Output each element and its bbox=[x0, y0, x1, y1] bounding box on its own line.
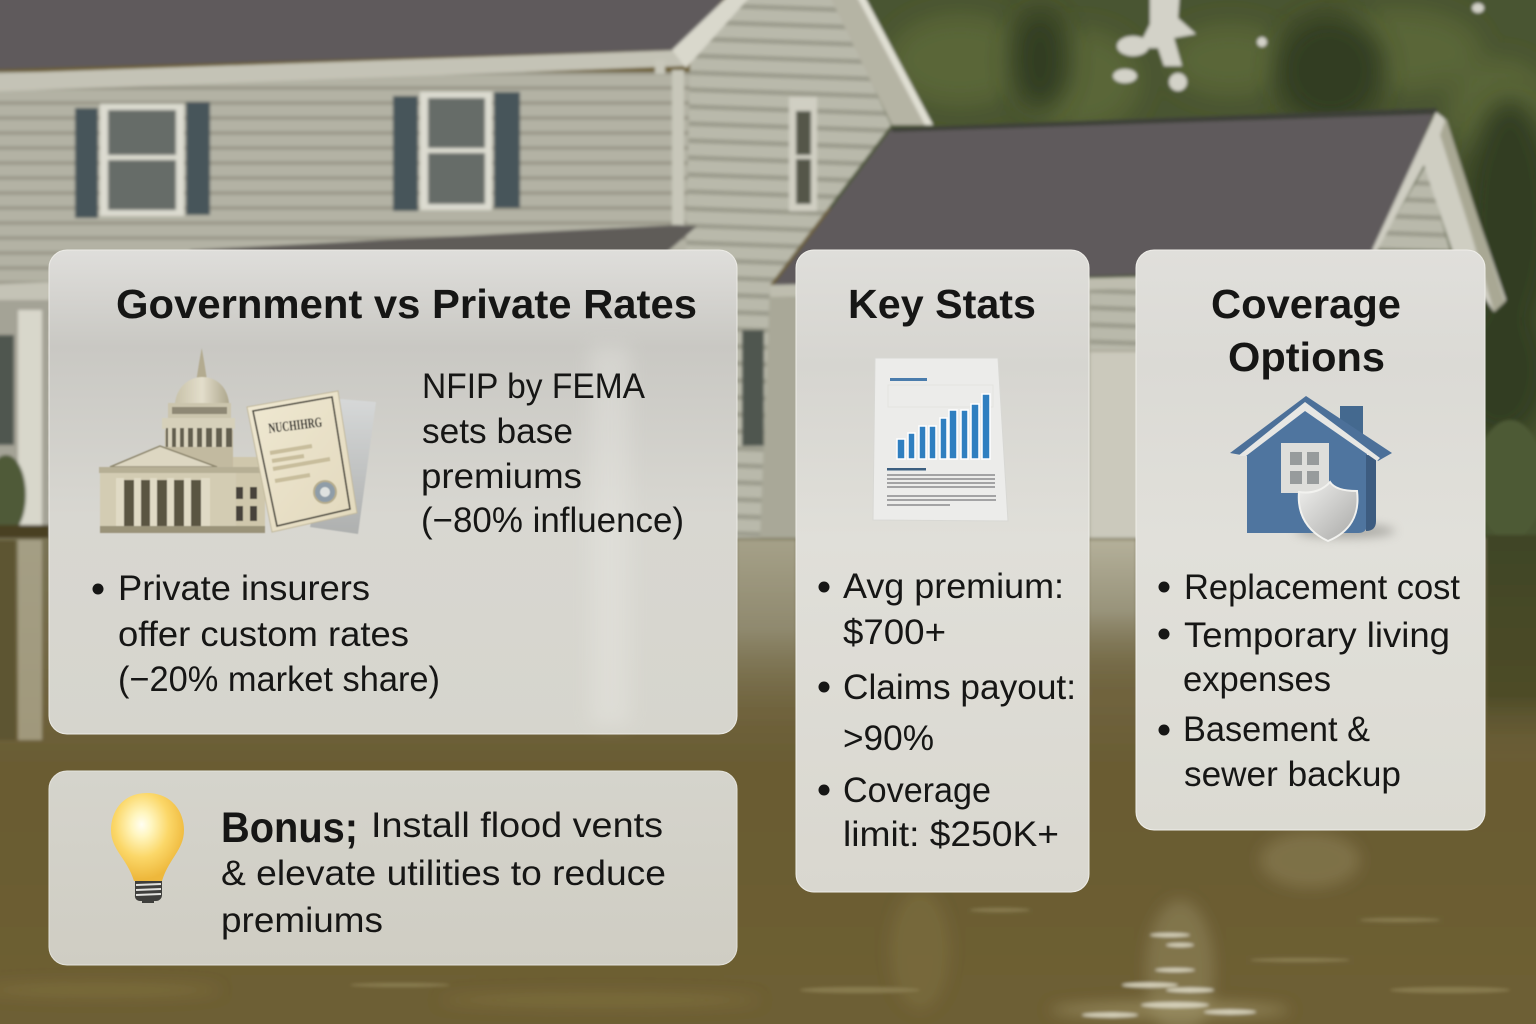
text: NFIP by FEMA sets base premiums: (−80% influence) bbox=[421, 501, 684, 540]
bullet: average premium: Avg premium: bbox=[843, 567, 1064, 606]
gable wall bbox=[680, 0, 891, 540]
heading: Coverage Options: Coverage bbox=[1211, 281, 1401, 327]
bullet: claims payout: Claims payout: bbox=[843, 668, 1076, 707]
text: bonus tip: Bonus; bbox=[221, 804, 358, 852]
shrubs bbox=[0, 455, 26, 535]
text: NFIP by FEMA sets base premiums: premiums bbox=[421, 457, 582, 496]
icon: house with shield bbox=[1230, 396, 1395, 541]
heading: Government vs Private Rates: Government vs Private Rates bbox=[116, 281, 697, 327]
icon: capitol building and policy document bbox=[99, 348, 376, 534]
lower porch roof bbox=[190, 225, 697, 262]
panel: bonus tip bbox=[49, 771, 737, 965]
bullet: temporary living expenses: Temporary living bbox=[1184, 616, 1450, 655]
bullet: basement and sewer backup: Basement & bbox=[1183, 710, 1370, 749]
bullet: replacement cost: Replacement cost bbox=[1184, 568, 1460, 607]
policy document bbox=[247, 391, 357, 532]
right section wall + garage bbox=[760, 250, 1470, 540]
left house wall bbox=[0, 72, 700, 542]
bullet: private insurers: (−20% market share) bbox=[118, 660, 440, 699]
ripples bbox=[0, 832, 1360, 1024]
bullet: average premium bbox=[818, 567, 1064, 652]
bullet: private insurers bbox=[92, 569, 440, 699]
bullet: private insurers: Private insurers bbox=[118, 569, 370, 608]
bullet: claims payout bbox=[818, 668, 1076, 758]
policy document: NUCHIHRG bbox=[268, 415, 323, 437]
bullet: coverage limit bbox=[818, 771, 1059, 854]
heading: Coverage Options bbox=[1211, 281, 1401, 380]
panel: Coverage Options bbox=[1136, 250, 1485, 830]
text: bonus tip: & elevate utilities to reduce bbox=[221, 854, 666, 893]
trees bbox=[830, 0, 1536, 540]
bullet: temporary living expenses: expenses bbox=[1183, 660, 1331, 699]
right roof bbox=[772, 108, 1436, 287]
bullet: basement and sewer backup: sewer backup bbox=[1184, 755, 1401, 794]
bullet: temporary living expenses bbox=[1158, 616, 1450, 699]
bullet: coverage limit: Coverage bbox=[843, 771, 991, 810]
text: NFIP by FEMA sets base premiums bbox=[421, 367, 684, 540]
text: bonus tip: premiums bbox=[221, 901, 383, 940]
upper roof bbox=[0, 0, 740, 70]
panel: Key Stats bbox=[796, 250, 1089, 892]
text: bonus tip: Install flood vents bbox=[371, 806, 663, 845]
panel: Government vs Private Rates bbox=[49, 250, 737, 734]
bullet: basement and sewer backup bbox=[1158, 710, 1401, 794]
small gable bbox=[1376, 165, 1450, 250]
text: NFIP by FEMA sets base premiums: NFIP by FEMA bbox=[422, 367, 646, 406]
water bbox=[0, 538, 1536, 1024]
windows left bbox=[75, 92, 817, 218]
text: NFIP by FEMA sets base premiums: sets base bbox=[422, 412, 573, 451]
bullet: coverage limit: limit: $250K+ bbox=[843, 815, 1059, 854]
icon: light bulb bbox=[111, 793, 184, 903]
heading: Coverage Options: Options bbox=[1228, 334, 1385, 380]
bullet: private insurers: offer custom rates bbox=[118, 615, 409, 654]
bullet: average premium: $700+ bbox=[843, 613, 946, 652]
capitol building bbox=[99, 348, 265, 533]
back sheet bbox=[310, 399, 376, 534]
bullet: claims payout: >90% bbox=[843, 719, 934, 758]
text: bonus tip bbox=[221, 804, 666, 940]
icon: report with bar chart bbox=[873, 358, 1008, 521]
heading: Key Stats: Key Stats bbox=[848, 281, 1036, 327]
